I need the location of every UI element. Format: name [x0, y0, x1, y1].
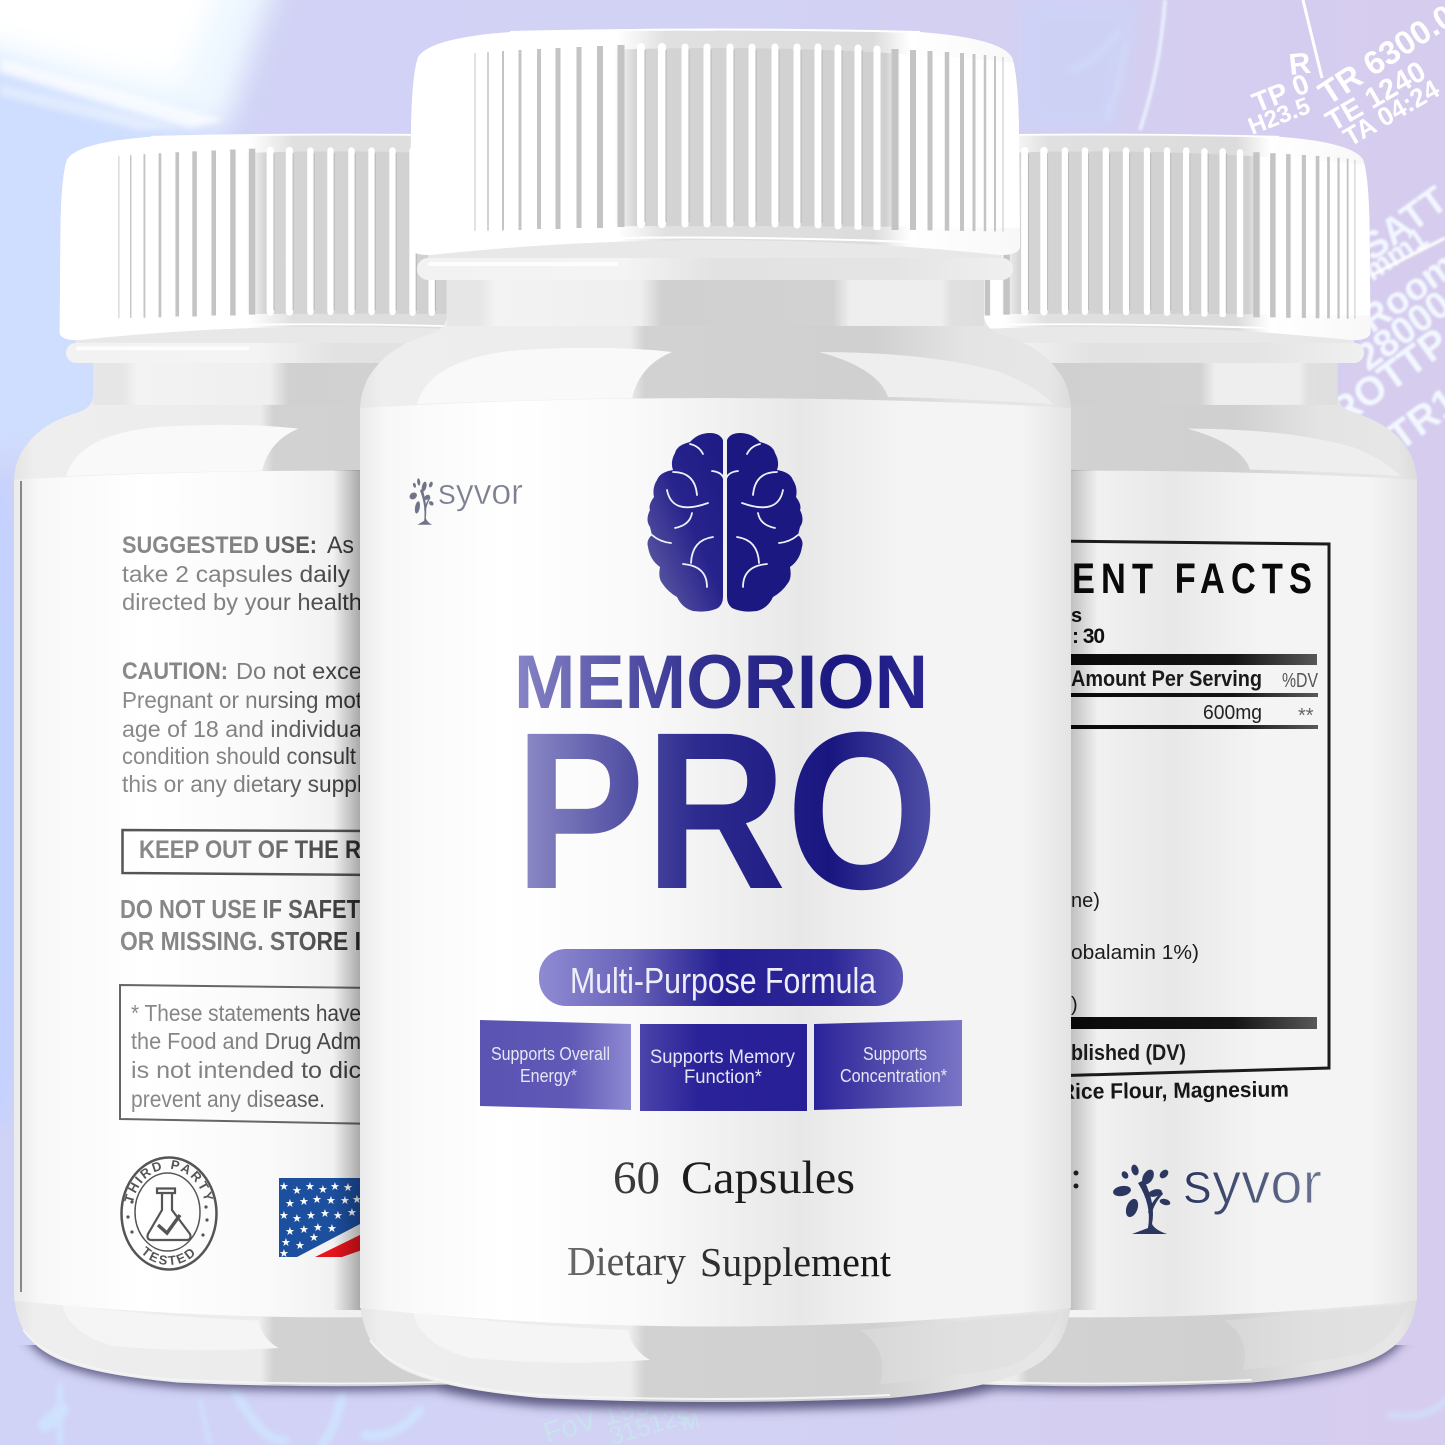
left label: suggested use: SUGGESTED USE:	[122, 532, 317, 559]
icon: american flag: ★	[326, 1195, 336, 1207]
supplement facts box: **	[1298, 705, 1314, 727]
icon: american flag: ★	[309, 1232, 319, 1244]
benefit box: memory: Function*	[684, 1067, 763, 1088]
other ingredients text: Rice Flour, Magnesium	[1060, 1077, 1289, 1104]
supplement facts box: )	[1071, 994, 1078, 1016]
left label: FDA statement box: prevent any disease.	[131, 1086, 325, 1112]
icon: third party tested seal: THIRD PARTY	[124, 1160, 214, 1202]
ground shadows	[22, 1345, 1408, 1418]
left label: caution: this or any dietary suppl	[122, 771, 362, 797]
supplement facts box	[1050, 541, 1329, 1076]
right bottle	[769, 130, 1417, 1386]
capsule count: 60	[613, 1152, 660, 1204]
dietary supplement	[567, 1238, 892, 1285]
left label: caution	[122, 658, 363, 797]
background scan text, top right: R	[1287, 47, 1313, 82]
icon: third party tested seal	[120, 1156, 218, 1271]
icon: american flag: ★	[318, 1184, 328, 1196]
title: MEMORION: MEMORION	[514, 640, 928, 725]
center bottle	[360, 25, 1071, 1402]
icon: american flag: ★	[327, 1223, 337, 1235]
background glow, bottom	[45, 1385, 1445, 1445]
left label: FDA statement box: the Food and Drug Adm	[131, 1028, 361, 1054]
background scan text, right side	[1321, 179, 1445, 459]
supplement facts box: : 30	[1072, 625, 1105, 648]
icon: american flag: ★	[347, 1207, 357, 1219]
icon: american flag: ★	[352, 1194, 362, 1206]
icon: american flag: ★	[299, 1224, 309, 1236]
benefit box: concentration: Concentration*	[840, 1066, 947, 1086]
left label: storage warning: OR MISSING. STORE I	[120, 926, 361, 956]
background scan text, top right: TA 04:24	[1338, 73, 1445, 152]
icon: american flag: ★	[279, 1210, 289, 1222]
left label: suggested use	[122, 532, 362, 615]
icon: american flag: ★	[281, 1237, 291, 1249]
dietary supplement: Dietary	[567, 1238, 686, 1284]
left label: keep out box	[122, 830, 380, 875]
supplement facts box: s	[1071, 605, 1082, 627]
icon: american flag: ★	[299, 1196, 309, 1208]
pill: multi-purpose formula: Multi-Purpose Formula	[570, 960, 877, 1001]
background scan text, top right: H23.5	[1244, 92, 1314, 141]
background scan text, bottom: M	[679, 1408, 702, 1436]
dietary supplement: Supplement	[700, 1239, 892, 1285]
left label: caution: Pregnant or nursing mot	[122, 687, 363, 713]
left label: caution: age of 18 and individua	[122, 716, 362, 742]
icon: american flag: ★	[343, 1182, 353, 1194]
supplement facts box: ENT FACTS	[1072, 555, 1312, 603]
icon: american flag: ★	[279, 1181, 289, 1193]
background scan text, top right	[1244, 0, 1445, 152]
cast shadow on left bottle	[333, 470, 361, 1310]
icon: american flag: ★	[305, 1181, 315, 1193]
benefit box: energy: Supports Overall	[491, 1044, 610, 1064]
icon: american flag: ★	[285, 1226, 295, 1238]
icon: brain	[648, 433, 802, 612]
logo: syvor large	[1112, 1151, 1322, 1234]
icon: american flag: ★	[333, 1210, 343, 1222]
left label: caution: CAUTION:	[122, 658, 228, 685]
icon: american flag: ★	[285, 1198, 295, 1210]
icon: american flag: ★	[330, 1181, 340, 1193]
icon: american flag: ★	[312, 1194, 322, 1206]
left label: caution: condition should consult	[122, 743, 357, 769]
background scan text, top right: TE 1240	[1320, 56, 1431, 138]
supplement facts box: obalamin 1%)	[1071, 942, 1199, 964]
left label: storage warning: DO NOT USE IF SAFET	[120, 894, 360, 924]
icon: american flag: ★	[292, 1213, 302, 1225]
left label: FDA statement box: is not intended to dic	[131, 1057, 361, 1083]
left label: suggested use: directed by your health	[122, 589, 362, 615]
background scan text, top right: TP 0	[1248, 68, 1314, 119]
icon: american flag: ★	[306, 1210, 316, 1222]
icon: american flag: ★	[279, 1248, 289, 1260]
left label: storage warning	[120, 894, 361, 956]
logo: syvor large: syvor	[1183, 1151, 1322, 1216]
benefit box: concentration	[814, 1020, 962, 1110]
benefit box: memory: Supports Memory	[650, 1047, 795, 1068]
icon: third party tested seal: TESTED	[142, 1246, 194, 1265]
pill: multi-purpose formula	[539, 949, 903, 1006]
left bottle	[14, 134, 448, 1386]
left label: suggested use: take 2 capsules daily	[122, 561, 351, 587]
distributed by colon	[1074, 1170, 1078, 1188]
cast shadow on right bottle	[1070, 470, 1098, 1310]
icon: american flag: ★	[292, 1185, 302, 1197]
title: PRO: PRO	[514, 686, 938, 936]
icon: american flag: ★	[313, 1222, 323, 1234]
benefit box: energy	[480, 1020, 631, 1110]
icon: american flag: ★	[340, 1195, 350, 1207]
benefit box: energy: Energy*	[520, 1066, 577, 1086]
logo: syvor small: syvor	[438, 471, 523, 512]
icon: american flag: ★	[295, 1240, 305, 1252]
supplement facts box: Amount Per Serving	[1071, 666, 1262, 691]
left label: FDA statement box: * These statements have	[131, 1000, 361, 1026]
left label: suggested use: As	[327, 532, 354, 559]
icon: american flag: ★	[320, 1208, 330, 1220]
background scan text, right side: mm1	[1357, 221, 1434, 288]
supplement facts box: %DV	[1282, 670, 1319, 692]
supplement facts box: ne)	[1071, 890, 1100, 912]
supplement facts box: blished (DV)	[1071, 1040, 1186, 1065]
left label: caution: Do not exce	[236, 658, 362, 684]
logo: syvor small	[409, 471, 523, 525]
benefit box: memory	[640, 1024, 807, 1111]
left label: FDA statement box	[120, 985, 380, 1124]
benefit box: concentration: Supports	[863, 1044, 927, 1064]
left label: keep out box: KEEP OUT OF THE R	[139, 836, 361, 864]
supplement facts box: 600mg	[1203, 702, 1262, 724]
icon: american flag	[279, 1178, 362, 1260]
capsule count: Capsules	[681, 1152, 855, 1204]
